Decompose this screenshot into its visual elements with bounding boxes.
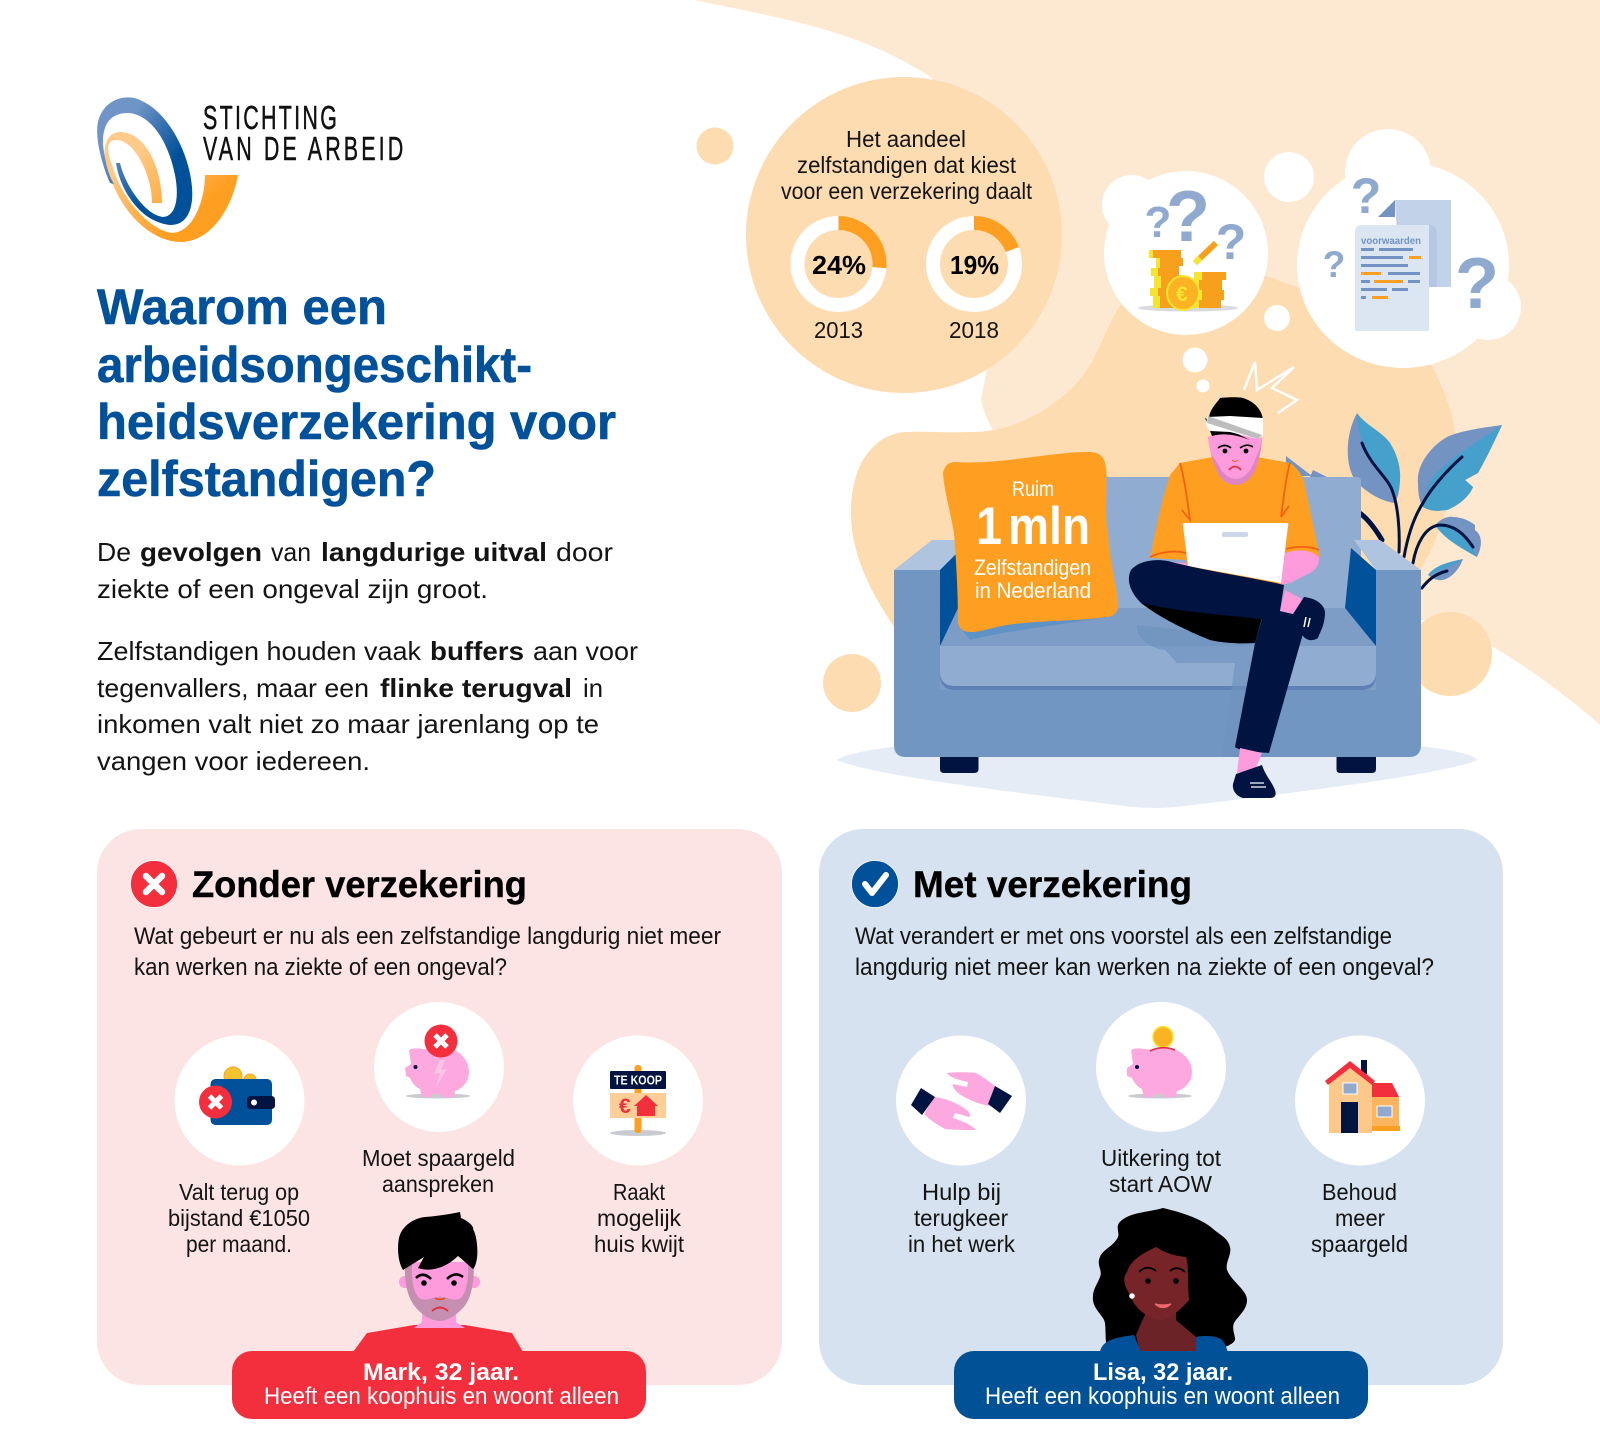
label: Behoud: [1322, 1179, 1397, 1205]
sofa seat: [940, 608, 1376, 690]
label: aanspreken: [382, 1171, 494, 1197]
pillow: 1 mln callout: Zelfstandigen: [974, 555, 1091, 580]
label: huis kwijt: [594, 1231, 684, 1257]
logo swirl: [97, 97, 238, 242]
icon: document: voorwaarden: [1361, 235, 1421, 247]
intro text: aan voor: [533, 636, 638, 666]
item: house: [1295, 1036, 1425, 1257]
icon: house: [1325, 1060, 1400, 1133]
panel heading: Zonder verzekering: [192, 864, 527, 905]
back leaf: [1286, 456, 1327, 477]
face: [1124, 1247, 1189, 1320]
label: Moet spaargeld: [362, 1145, 515, 1171]
laptop: [1183, 523, 1288, 583]
label: mogelijk: [597, 1205, 681, 1231]
panel intro: [855, 923, 1434, 981]
bandage: [1206, 416, 1263, 439]
donut chart: 24% in 2013: [798, 216, 886, 343]
panel heading: Met verzekering: [913, 864, 1192, 905]
intro text: De: [97, 537, 131, 567]
icon: for sale sign: TE KOOP: [614, 1074, 662, 1088]
label: [908, 1179, 1015, 1257]
statistic heading: voor een verzekering daalt: [781, 178, 1033, 204]
hair: [1209, 397, 1263, 419]
icon: question marks: ?: [1455, 244, 1499, 324]
thought bubble dots: [1182, 152, 1314, 392]
icon: wallet: [199, 1067, 275, 1125]
label: start AOW: [1109, 1171, 1213, 1197]
shirt: [1150, 457, 1320, 590]
statistic heading: [781, 126, 1033, 204]
statistic heading: zelfstandigen dat kiest: [797, 152, 1017, 178]
title: zelfstandigen?: [97, 451, 436, 507]
intro text: ziekte of een ongeval zijn groot.: [97, 574, 488, 604]
logo text: STICHTING: [203, 99, 337, 136]
icon: blue check: [852, 860, 898, 908]
icon: question marks: ?: [1351, 168, 1381, 224]
icon: red cross: [130, 860, 178, 908]
panel intro: Wat gebeurt er nu als een zelfstandige langdurig niet meer: [134, 923, 721, 950]
title: Waarom een: [97, 279, 387, 335]
donut chart: 19% in 2018: [933, 216, 1019, 343]
floor shadow: [837, 744, 1478, 808]
label: Hulp bij: [922, 1179, 1001, 1205]
label: [168, 1179, 310, 1257]
badge: Lisa: Heeft een koophuis en woont alleen: [985, 1383, 1340, 1410]
item: house for sale: [573, 1036, 703, 1257]
icon: question marks: [1145, 177, 1246, 270]
icon: question marks: ?: [1145, 198, 1171, 247]
icon: piggy bank: [1127, 1026, 1192, 1098]
panel intro: kan werken na ziekte of een ongeval?: [134, 954, 507, 981]
label: Valt terug op: [179, 1179, 299, 1205]
raised foot: [1280, 590, 1325, 640]
label: in het werk: [908, 1231, 1015, 1257]
label: terugkeer: [914, 1205, 1008, 1231]
panel intro: Wat verandert er met ons voorstel als een zelfstandige: [855, 923, 1392, 950]
icon: document: [1355, 200, 1451, 331]
panel: Zonder verzekering: [97, 829, 782, 1419]
decorative circles behind sofa: [823, 612, 1492, 712]
intro text: langdurige uitval: [321, 537, 547, 567]
label: [1311, 1179, 1408, 1257]
standing foot: [1233, 748, 1276, 798]
icon: for sale sign: €: [619, 1095, 631, 1118]
person on sofa: [1129, 397, 1325, 798]
sofa: [894, 477, 1421, 773]
intro text: buffers: [430, 636, 524, 666]
hair: [398, 1212, 477, 1270]
panel: Met verzekering: [819, 829, 1503, 1419]
pillow: 1 mln callout: Ruim: [1012, 478, 1054, 501]
icon: question marks: [1323, 168, 1499, 324]
donut chart: 19% in 2018: 2018: [949, 317, 999, 343]
icon: stress zigzag: [1244, 362, 1297, 413]
background blob: darker peach: [851, 268, 1456, 700]
panel: share of self-employed with insurance: [746, 77, 1062, 393]
thought bubble: coins: [1102, 171, 1268, 335]
label: Uitkering tot: [1101, 1145, 1221, 1171]
badge: Lisa: [954, 1351, 1368, 1419]
panel intro: [134, 923, 721, 981]
icon: for sale sign: [610, 1065, 666, 1136]
logo text: VAN DE ARBEID: [203, 130, 403, 167]
ears and face: [399, 1276, 411, 1288]
title: [97, 279, 616, 507]
shirt: [353, 1325, 523, 1352]
intro text: gevolgen: [140, 537, 262, 567]
decorative circle: top: [696, 128, 734, 164]
donut chart: 24% in 2013: 24%: [812, 250, 866, 280]
label: spaargeld: [1311, 1231, 1408, 1257]
intro text: flinke terugval: [380, 673, 572, 703]
intro text: van: [271, 537, 311, 567]
sofa inner arms: [940, 552, 958, 648]
title: arbeidsongeschikt-: [97, 337, 532, 393]
arm: [1280, 550, 1319, 585]
badge: Mark: Heeft een koophuis en woont alleen: [264, 1383, 619, 1410]
label: per maand.: [186, 1231, 292, 1257]
plant: [1348, 413, 1502, 588]
panel intro: langdurig niet meer kan werken na ziekte of een ongeval?: [855, 954, 1434, 981]
icon: piggy bank with cross: [405, 1024, 470, 1098]
face details: [416, 1274, 463, 1311]
label: bijstand €1050: [168, 1205, 310, 1231]
icon: question marks: ?: [1323, 244, 1345, 285]
neck: [414, 1300, 465, 1328]
intro text: [97, 537, 638, 776]
item: piggy bank with coin: [1096, 1002, 1226, 1197]
person shadow on sofa: [1137, 625, 1275, 757]
label: [594, 1179, 684, 1257]
label: [362, 1145, 515, 1197]
statistic heading: Het aandeel: [846, 126, 966, 152]
pillow: 1 mln callout: [943, 452, 1118, 632]
sofa cushion: [940, 646, 1376, 690]
donut chart: 24% in 2013: 2013: [814, 317, 863, 343]
neck: [1136, 1310, 1196, 1352]
intro text: Zelfstandigen houden vaak: [97, 636, 422, 666]
intro text: vangen voor iedereen.: [97, 746, 370, 776]
label: meer: [1335, 1205, 1385, 1231]
badge: Mark: Mark, 32 jaar.: [363, 1359, 519, 1386]
icon: hands: [911, 1072, 1012, 1130]
item: helping hands: [896, 1036, 1026, 1257]
logo: Stichting van de Arbeid: [97, 97, 403, 242]
title: heidsverzekering voor: [97, 394, 616, 450]
sofa arm tops: [894, 540, 960, 570]
icon: question marks: ?: [1166, 177, 1210, 257]
hair: [1093, 1208, 1247, 1347]
portrait: Mark: [353, 1212, 523, 1352]
donut chart: 19% in 2018: 19%: [950, 250, 999, 280]
badge: Mark: [232, 1351, 646, 1419]
intro text: in: [583, 673, 603, 703]
pillow: 1 mln callout: in Nederland: [975, 578, 1091, 603]
blouse: [1100, 1335, 1228, 1352]
logo text: [203, 99, 403, 167]
portrait: Lisa: [1093, 1208, 1247, 1352]
item: piggy bank: [362, 1002, 515, 1197]
head: [1208, 437, 1262, 485]
icon: coin stacks: [1138, 243, 1238, 312]
sofa back: [1000, 477, 1361, 617]
intro text: inkomen valt niet zo maar jarenlang op te: [97, 709, 599, 739]
intro text: door: [556, 537, 613, 567]
icon: coin stacks: €: [1176, 283, 1188, 306]
face details: [1129, 1268, 1185, 1308]
pillow: 1 mln callout: mln: [1008, 497, 1090, 556]
item: wallet: [168, 1036, 310, 1257]
pillow: 1 mln callout: 1: [976, 497, 1002, 556]
icon: question marks: ?: [1216, 214, 1246, 270]
badge: Lisa: Lisa, 32 jaar.: [1093, 1359, 1233, 1386]
pillow shadow: [958, 610, 1100, 640]
sofa frame: [894, 570, 1421, 757]
label: Raakt: [613, 1179, 665, 1205]
label: [1101, 1145, 1221, 1197]
legs: [1129, 560, 1304, 753]
sofa legs: [940, 757, 978, 773]
intro text: tegenvallers, maar een: [97, 673, 369, 703]
background blob: light peach: [694, 0, 1600, 725]
thought bubble: conditions document: [1297, 129, 1521, 368]
face details: [1218, 445, 1253, 470]
